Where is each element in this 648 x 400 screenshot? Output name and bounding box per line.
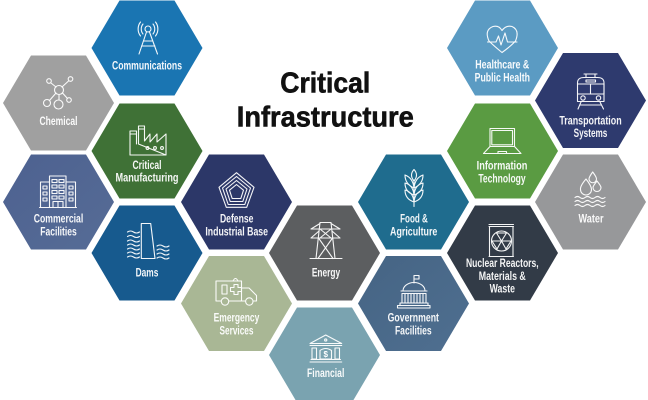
panel: nuclear reactors, materials and waste (447, 206, 558, 300)
panel: critical manufacturing (92, 104, 202, 198)
label: transportation systems (559, 115, 622, 140)
label: dams: Dams (136, 268, 158, 280)
icon: wheat (405, 170, 423, 206)
title: Critical (280, 67, 370, 99)
title: Infrastructure (237, 102, 414, 134)
label: food and agriculture: Food & (400, 214, 428, 226)
label: healthcare and public health: Public Health (475, 73, 530, 85)
icon: office buildings (40, 176, 76, 208)
label: emergency services: Services (220, 325, 254, 337)
label: information technology (477, 160, 527, 185)
label: critical manufacturing: Critical (132, 160, 162, 172)
panel: dams (92, 206, 202, 300)
label: government facilities: Government (388, 312, 439, 324)
label: critical manufacturing (116, 160, 178, 184)
panel: communications (92, 0, 202, 96)
label: financial: Financial (307, 368, 344, 380)
panel: government facilities (358, 256, 469, 351)
panel: defense industrial base (181, 154, 292, 250)
label: government facilities (388, 312, 439, 337)
icon: molecule (44, 77, 73, 109)
panel: emergency services (181, 256, 292, 351)
label: commercial facilities: Facilities (40, 226, 77, 238)
panel: energy (269, 206, 380, 300)
label: emergency services: Emergency (214, 312, 260, 324)
label: nuclear reactors, materials and waste: Nuclear Reactors, (466, 258, 539, 270)
panel: food and agriculture (358, 154, 469, 250)
title (237, 67, 414, 134)
label: defense industrial base: Industrial Base (205, 226, 268, 238)
label: nuclear reactors, materials and waste (466, 258, 539, 296)
icon: ambulance (216, 278, 256, 305)
label: defense industrial base (205, 214, 268, 238)
panel: financial (269, 308, 380, 400)
label: critical manufacturing: Manufacturing (116, 172, 178, 184)
icon: pentagon (219, 173, 254, 207)
label: government facilities: Facilities (395, 325, 432, 337)
label: water: Water (578, 214, 604, 226)
icon: heart with pulse (487, 26, 517, 52)
label: food and agriculture: Agriculture (390, 227, 437, 239)
panel: chemical (3, 56, 114, 150)
icon: train (578, 74, 604, 109)
panel: commercial facilities (3, 154, 114, 250)
label: healthcare and public health: Healthcare & (475, 60, 529, 72)
label: nuclear reactors, materials and waste: Waste (490, 284, 515, 296)
label: energy: Energy (312, 268, 341, 280)
panel: water (535, 154, 646, 250)
icon: capitol building (398, 276, 430, 308)
icon: antenna tower (138, 22, 158, 54)
icon: bank (310, 335, 342, 362)
label: transportation systems: Systems (574, 128, 607, 140)
label: healthcare and public health (475, 60, 530, 85)
label: defense industrial base: Defense (220, 214, 253, 226)
icon: dollar sign: $ (323, 350, 328, 359)
label: nuclear reactors, materials and waste: Materials & (479, 271, 526, 283)
label: information technology: Technology (478, 173, 526, 185)
label: commercial facilities: Commercial (34, 214, 83, 226)
panel: healthcare and public health (447, 0, 558, 96)
label: information technology: Information (477, 160, 527, 172)
icon: dam (128, 224, 169, 259)
icon: factory (130, 126, 166, 155)
panel: information technology (447, 104, 558, 198)
label: communications: Communications (112, 60, 182, 72)
icon: laptop (484, 128, 521, 154)
label: food and agriculture (390, 214, 437, 239)
icon: radiation reactor (489, 224, 514, 256)
label: transportation systems: Transportation (559, 115, 622, 127)
label: emergency services (214, 312, 260, 337)
label: chemical: Chemical (40, 116, 78, 128)
icon: transmission tower (310, 222, 342, 258)
label: commercial facilities (34, 214, 83, 238)
icon: water drops (575, 172, 605, 206)
panel: transportation systems (535, 53, 646, 148)
